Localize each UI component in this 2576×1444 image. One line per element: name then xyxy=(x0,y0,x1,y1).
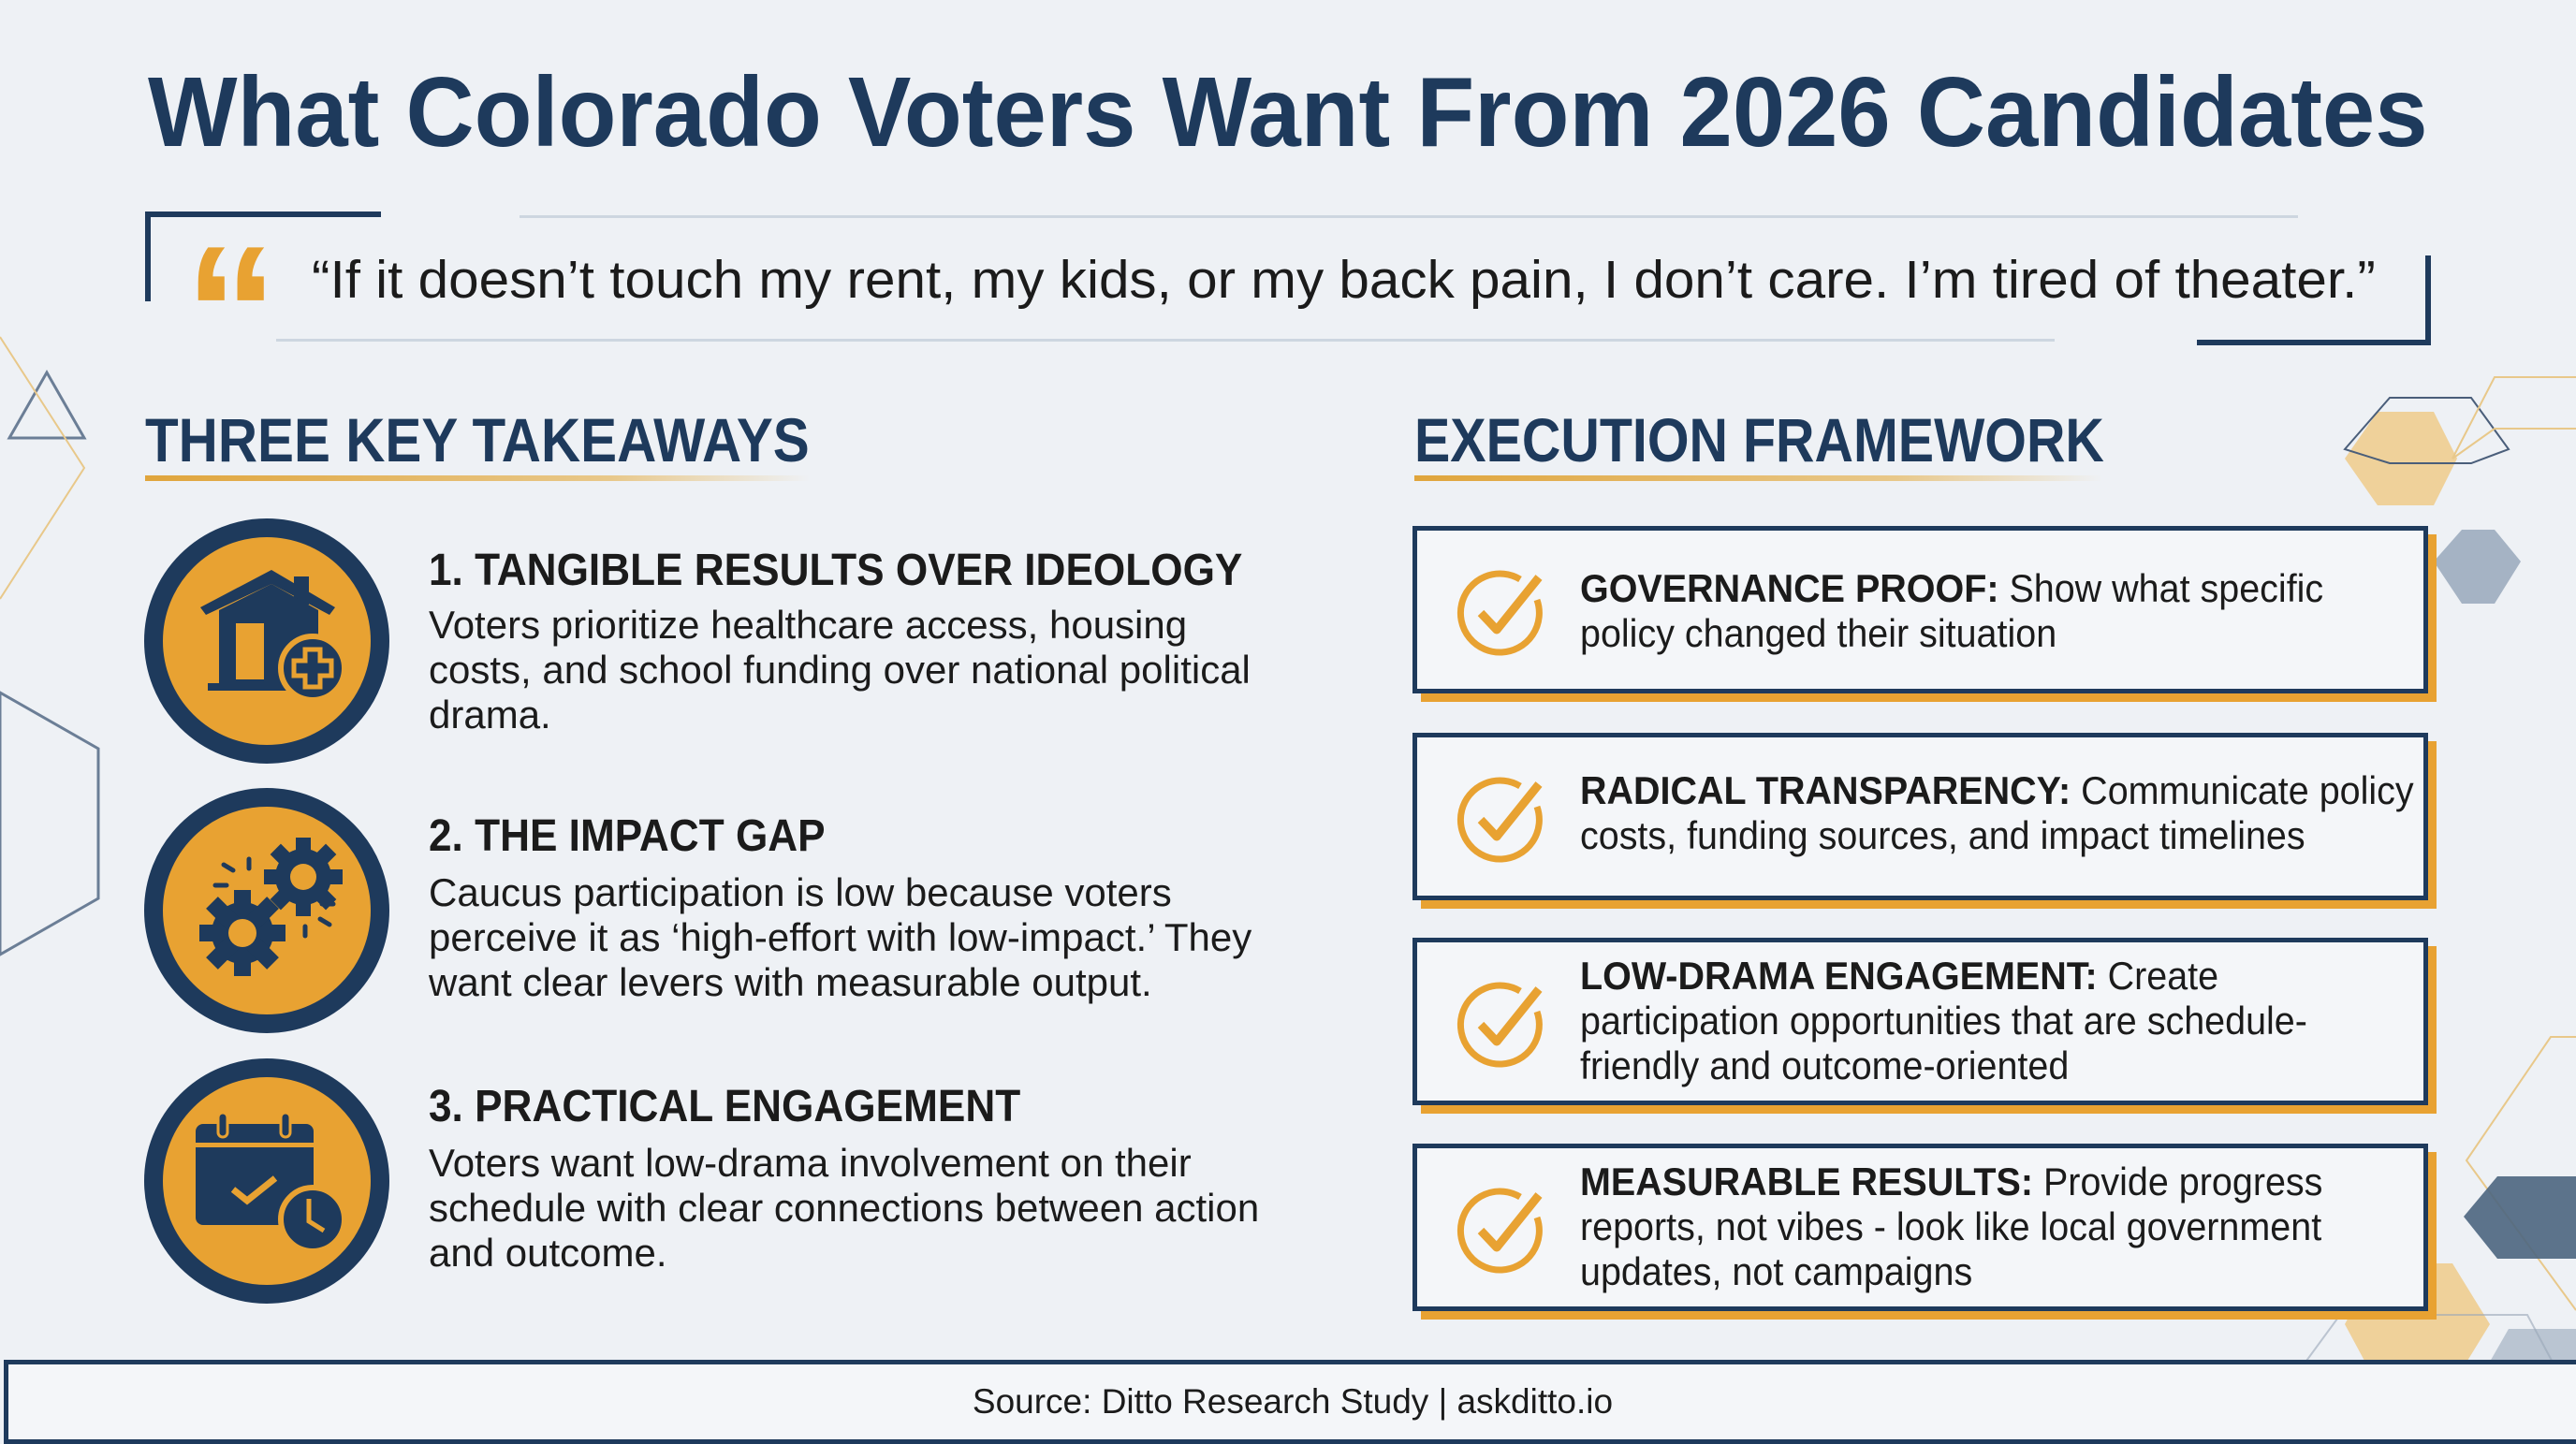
icon: check xyxy=(1456,1189,1543,1273)
heading: 3. PRACTICAL ENGAGEMENT xyxy=(429,1082,1020,1131)
body: drama. xyxy=(429,693,551,737)
body: and outcome. xyxy=(429,1231,667,1275)
body xyxy=(429,603,1251,737)
takeaway 2 xyxy=(144,788,1252,1033)
takeaway 1 xyxy=(144,518,1251,764)
framework box 3 xyxy=(1412,938,2428,1105)
icon: check xyxy=(1456,983,1543,1067)
text: costs, funding sources, and impact timelines xyxy=(1580,813,2305,857)
text: friendly and outcome-oriented xyxy=(1580,1043,2069,1087)
text xyxy=(1580,1160,2322,1293)
text xyxy=(1580,954,2307,1087)
heading: three key takeaways: THREE KEY TAKEAWAYS xyxy=(145,405,810,474)
text: GOVERNANCE PROOF: Show what specific xyxy=(1580,566,2323,610)
source text: Source: Ditto Research Study | askditto.io xyxy=(973,1382,1613,1421)
heading: execution framework: EXECUTION FRAMEWORK xyxy=(1414,405,2104,474)
quote text: “If it doesn’t touch my rent, my kids, or my back pain, I don’t care. I’m tired of theater.” xyxy=(312,250,2376,310)
icon: gears xyxy=(144,788,389,1033)
body xyxy=(429,870,1252,1004)
body xyxy=(429,1141,1259,1275)
text xyxy=(1580,768,2414,857)
body: Caucus participation is low because voters xyxy=(429,870,1172,914)
framework box 4 xyxy=(1412,1144,2428,1311)
icon: calendar with clock xyxy=(144,1058,389,1304)
text: RADICAL TRANSPARENCY: Communicate policy xyxy=(1580,768,2414,812)
text: updates, not campaigns xyxy=(1580,1249,1972,1293)
body: want clear levers with measurable output. xyxy=(429,960,1152,1004)
text: reports, not vibes - look like local government xyxy=(1580,1204,2321,1248)
title: What Colorado Voters Want From 2026 Candidates xyxy=(148,57,2428,168)
body: Voters prioritize healthcare access, housing xyxy=(429,603,1187,647)
heading: 2. THE IMPACT GAP xyxy=(429,811,826,861)
takeaway 3 xyxy=(144,1058,1259,1304)
footer xyxy=(4,1360,2576,1444)
text: policy changed their situation xyxy=(1580,611,2056,655)
body: Voters want low-drama involvement on their xyxy=(429,1141,1192,1185)
body: costs, and school funding over national political xyxy=(429,648,1251,692)
text: participation opportunities that are schedule- xyxy=(1580,999,2307,1043)
text: MEASURABLE RESULTS: Provide progress xyxy=(1580,1160,2322,1203)
framework box 1 xyxy=(1412,526,2428,693)
icon: quote mark: “ xyxy=(184,208,278,416)
text xyxy=(1580,566,2323,655)
quote block xyxy=(145,208,2431,416)
icon: check xyxy=(1456,571,1543,655)
body: schedule with clear connections between action xyxy=(429,1186,1259,1230)
heading: 1. TANGIBLE RESULTS OVER IDEOLOGY xyxy=(429,546,1242,595)
icon: check xyxy=(1456,777,1543,863)
icon: house with plus xyxy=(144,518,389,764)
framework box 2 xyxy=(1412,733,2428,900)
body: perceive it as ‘high-effort with low-impact.’ They xyxy=(429,915,1251,959)
text: LOW-DRAMA ENGAGEMENT: Create xyxy=(1580,954,2218,998)
